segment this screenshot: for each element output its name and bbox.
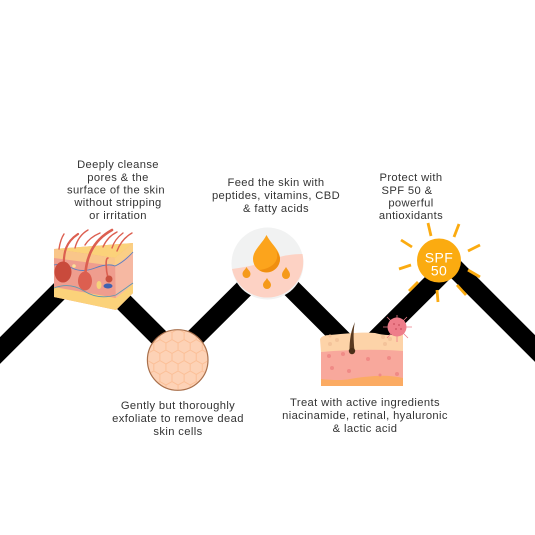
text: treat step: Treat with active ingredients bbox=[290, 397, 440, 409]
icon: SPF 50 sun: 50 bbox=[431, 262, 447, 278]
text: exfoliate step bbox=[112, 400, 244, 438]
text: cleanse step: or irritation bbox=[89, 210, 147, 222]
text: treat step bbox=[282, 397, 448, 435]
icon: SPF 50 sun bbox=[399, 223, 480, 302]
text: cleanse step: surface of the skin bbox=[67, 184, 165, 196]
text: cleanse step bbox=[67, 159, 165, 222]
text: protect step: Protect with bbox=[379, 172, 443, 184]
hair follicles bbox=[59, 230, 132, 278]
text: treat step: & lactic acid bbox=[333, 423, 397, 435]
text: protect step: SPF 50 & bbox=[382, 185, 433, 197]
text: exfoliate step: exfoliate to remove dead bbox=[112, 413, 244, 425]
text: exfoliate step: skin cells bbox=[153, 426, 203, 438]
icon: skin with hair and pimple bbox=[320, 315, 412, 386]
text: protect step bbox=[379, 172, 443, 222]
icon: skin cross-section cube bbox=[54, 230, 133, 310]
icon: serum drop circle bbox=[232, 228, 304, 300]
text: feed step: peptides, vitamins, CBD bbox=[212, 190, 340, 202]
text: cleanse step: pores & the bbox=[87, 172, 149, 184]
text: exfoliate step: Gently but thoroughly bbox=[121, 400, 235, 412]
text: cleanse step: without stripping bbox=[73, 197, 162, 209]
text: treat step: niacinamide, retinal, hyaluronic bbox=[282, 410, 448, 422]
text: protect step: antioxidants bbox=[379, 210, 443, 222]
pimple bbox=[383, 315, 412, 342]
text: feed step: & fatty acids bbox=[243, 203, 309, 215]
zigzag line bbox=[0, 264, 535, 370]
text: cleanse step: Deeply cleanse bbox=[77, 159, 159, 171]
icon: SPF 50 sun: SPF bbox=[425, 250, 453, 266]
text: protect step: powerful bbox=[388, 198, 434, 210]
text: feed step bbox=[212, 177, 340, 215]
icon: exfoliated skin circle bbox=[147, 330, 208, 390]
text: feed step: Feed the skin with bbox=[227, 177, 325, 189]
